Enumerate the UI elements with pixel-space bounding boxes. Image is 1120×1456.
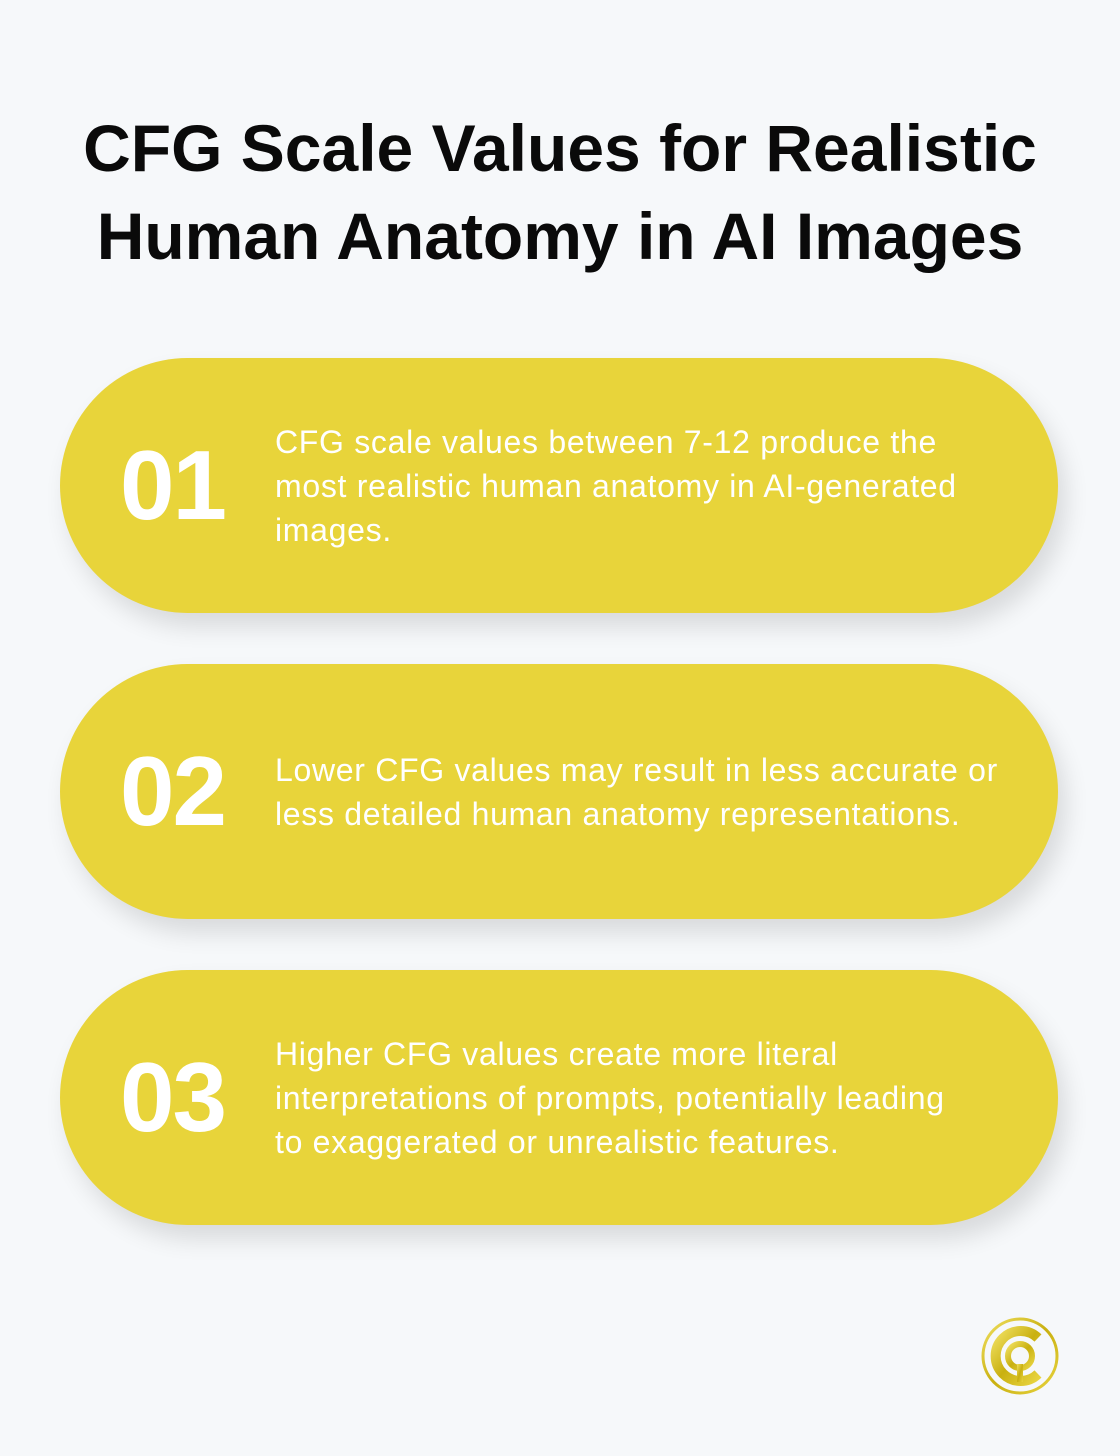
panel: card 01	[60, 358, 1058, 613]
text 01: CFG scale values between 7-12 produce the	[275, 424, 937, 460]
text 01: images.	[275, 512, 392, 548]
icon: logo	[982, 1318, 1058, 1394]
text 01: most realistic human anatomy in AI-generated	[275, 468, 957, 504]
text 03	[275, 1036, 945, 1160]
text 03: to exaggerated or unrealistic features.	[275, 1124, 840, 1160]
text 03: interpretations of prompts, potentially leading	[275, 1080, 945, 1116]
number 02: 02	[120, 736, 225, 846]
text 02: Lower CFG values may result in less accurate or	[275, 752, 998, 788]
panel: card 02	[60, 664, 1058, 919]
text 02	[275, 752, 998, 832]
text 01	[275, 424, 957, 548]
number 03: 03	[120, 1042, 225, 1152]
title	[83, 111, 1037, 273]
title: Human Anatomy in AI Images	[97, 199, 1023, 273]
panel: card 03	[60, 970, 1058, 1225]
text 03: Higher CFG values create more literal	[275, 1036, 838, 1072]
number 01: 01	[120, 430, 225, 540]
text 02: less detailed human anatomy representations.	[275, 796, 960, 832]
title: CFG Scale Values for Realistic	[83, 111, 1037, 185]
